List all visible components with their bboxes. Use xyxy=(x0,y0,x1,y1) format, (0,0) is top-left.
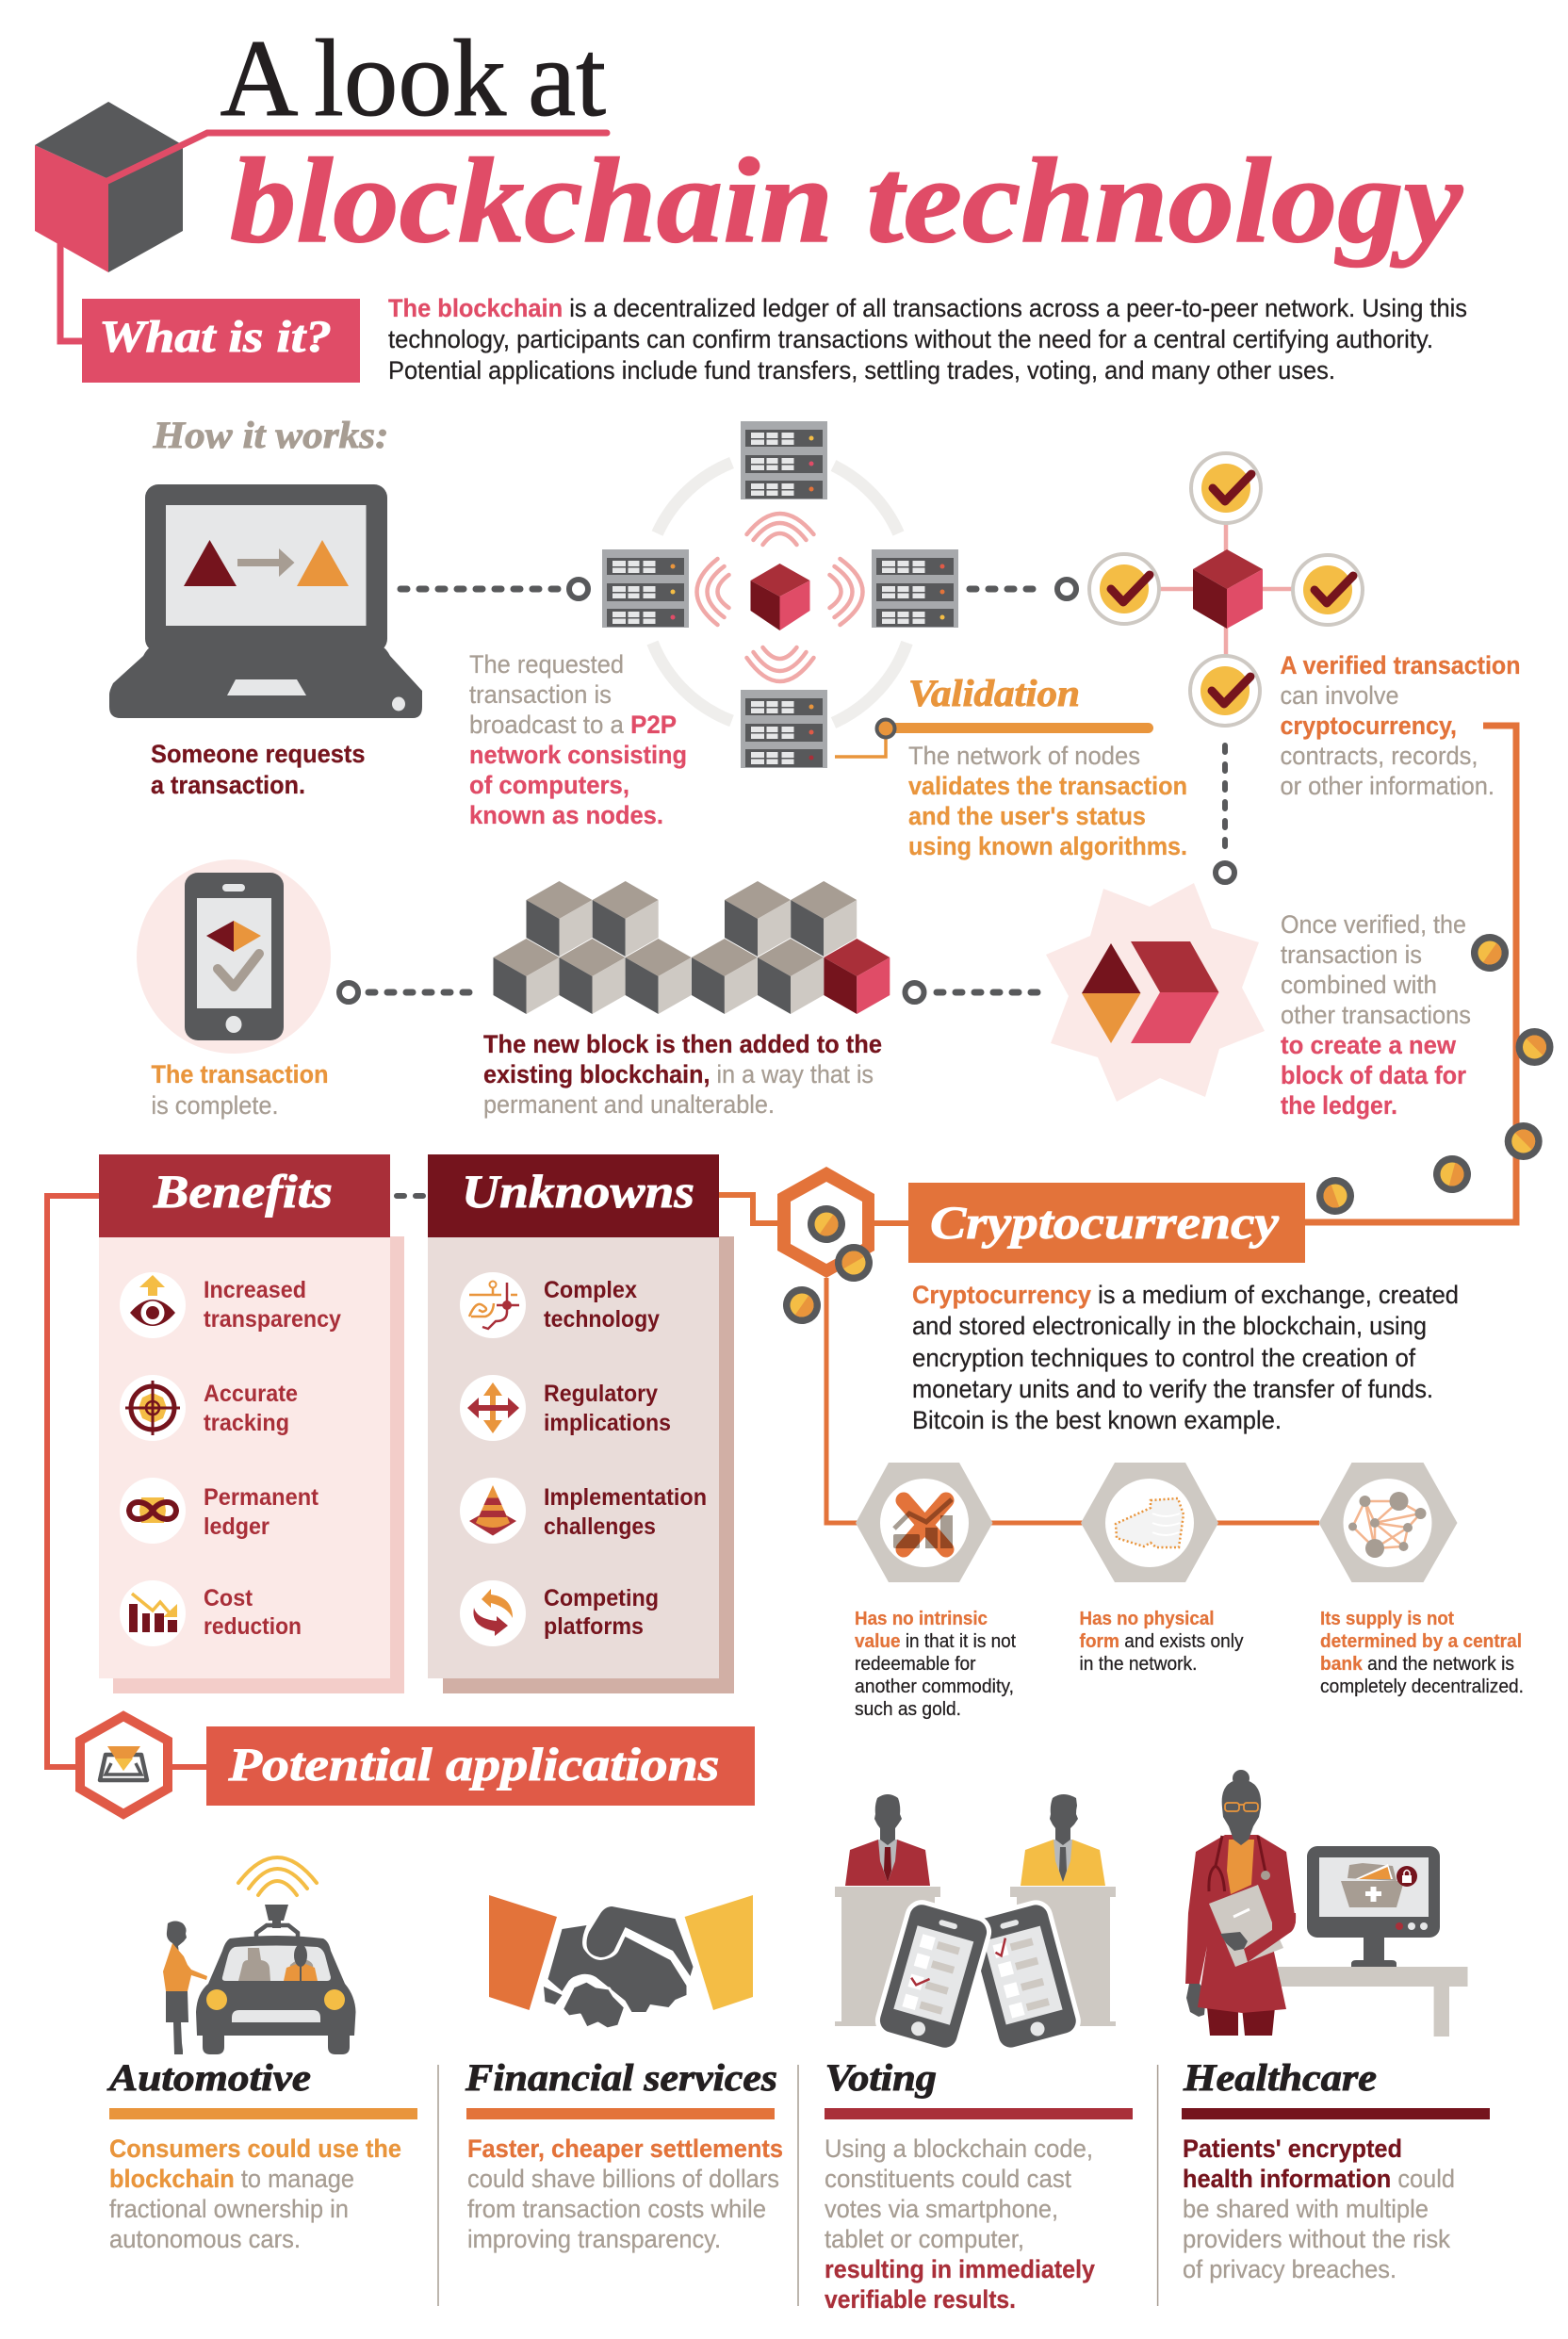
icon: potential applications hexagon xyxy=(80,1716,168,1814)
text: validation description: using known algorithms. xyxy=(908,832,1187,860)
text: new block added: permanent and unalterable. xyxy=(483,1090,775,1119)
text: automotive description: Consumers could use the xyxy=(109,2135,401,2163)
icon: coins along the line xyxy=(1311,926,1561,1220)
label: implementation challenges xyxy=(544,1484,707,1540)
dividers xyxy=(438,2065,1158,2306)
text: validation description xyxy=(908,742,1187,860)
text: requested transaction is broadcast: of computers, xyxy=(469,771,629,799)
text: no physical form: in the network. xyxy=(1080,1653,1197,1675)
text: requested transaction is broadcast: known as nodes. xyxy=(469,801,663,829)
heading: Financial services: Financial services xyxy=(465,2056,777,2099)
heading: Automotive: Automotive xyxy=(106,2056,311,2099)
heading: How it works: How it works: xyxy=(152,414,388,456)
arrow: dotted line to new block xyxy=(1216,745,1234,882)
text: someone requests: a transaction. xyxy=(151,771,305,799)
text: no physical form: Has no physical xyxy=(1080,1608,1214,1629)
text: blockchain definition: The blockchain is a decentralized ledger of all transactions across a peer-to-peer network. Using this xyxy=(388,294,1467,322)
text: voting description: verifiable results. xyxy=(825,2285,1016,2314)
text: voting description: votes via smartphone, xyxy=(825,2195,1058,2223)
label: cost reduction: Cost xyxy=(204,1585,253,1611)
text: requested transaction is broadcast: broadcast to a P2P xyxy=(469,711,677,739)
server: top xyxy=(741,421,827,499)
figure: candidate right xyxy=(1021,1794,1105,1886)
icon: network centre cube xyxy=(750,564,810,630)
arrow: laptop to network xyxy=(400,580,588,598)
icon: cost reduction chart xyxy=(120,1580,186,1646)
label: accurate tracking xyxy=(204,1381,298,1436)
text: once verified: Once verified, the xyxy=(1281,910,1466,939)
text: voting description xyxy=(825,2135,1095,2314)
text: financial description xyxy=(467,2135,783,2253)
label: complex technology xyxy=(544,1277,660,1333)
text: no physical form xyxy=(1080,1608,1244,1675)
text: automotive description: autonomous cars. xyxy=(109,2225,301,2253)
text: validation description: and the user's status xyxy=(908,802,1146,830)
text: healthcare description: Patients' encrypted xyxy=(1183,2135,1402,2163)
podium: left xyxy=(835,1887,940,2026)
label: complex technology: technology xyxy=(544,1306,660,1333)
title: A look at: A look at xyxy=(220,18,606,139)
text: validation description: validates the transaction xyxy=(908,772,1187,800)
text: cryptocurrency definition xyxy=(912,1281,1459,1434)
text: no intrinsic value: Has no intrinsic xyxy=(855,1608,988,1629)
label: regulatory implications: implications xyxy=(544,1410,671,1436)
text: a verified transaction: can involve xyxy=(1280,681,1398,710)
text: transaction complete xyxy=(151,1060,328,1120)
heading: What is it?: What is it? xyxy=(99,312,332,362)
podium: right xyxy=(1010,1887,1116,2026)
connector: benefits to unknowns dots xyxy=(397,1193,425,1199)
icon: no intrinsic value xyxy=(856,1463,993,1582)
heading: Cryptocurrency: Cryptocurrency xyxy=(930,1196,1280,1249)
connector: unknowns to cryptocurrency hexagon xyxy=(719,1195,908,1223)
text: a verified transaction: A verified transaction xyxy=(1280,651,1521,679)
text: transaction complete: The transaction xyxy=(151,1060,328,1088)
text: no intrinsic value: such as gold. xyxy=(855,1698,961,1720)
icon: traffic cone xyxy=(460,1478,526,1544)
arrow: new block to blockchain xyxy=(905,983,1040,1002)
diagram: peer-to-peer network xyxy=(602,421,958,768)
heading: Validation: Validation xyxy=(908,672,1080,714)
server: left xyxy=(602,549,689,628)
heading: Unknowns: Unknowns xyxy=(462,1165,694,1218)
text: automotive description xyxy=(109,2135,401,2253)
icon: smartphone complete xyxy=(137,859,331,1054)
text: supply not determined: Its supply is not xyxy=(1320,1608,1454,1629)
text: new block added: The new block is then added to the xyxy=(483,1030,882,1058)
label: competing platforms: Competing xyxy=(544,1585,659,1611)
arrow: network to validation xyxy=(970,580,1076,598)
heading: Voting: Voting xyxy=(825,2056,937,2099)
figure: candidate left xyxy=(845,1794,930,1886)
text: a verified transaction xyxy=(1280,651,1521,800)
text: voting description: resulting in immediately xyxy=(825,2255,1095,2283)
text: voting description: tablet or computer, xyxy=(825,2225,1024,2253)
icon: title cube with connector lines xyxy=(35,102,607,341)
label: regulatory implications xyxy=(544,1381,671,1436)
server: right xyxy=(872,549,958,628)
connector: validation bar xyxy=(835,720,1153,757)
diagram: verified transaction cube and checks xyxy=(1089,453,1363,726)
text: a verified transaction: contracts, records, xyxy=(1280,742,1478,770)
text: once verified xyxy=(1281,910,1471,1120)
icon: check left xyxy=(1089,554,1159,624)
text: no intrinsic value: another commodity, xyxy=(855,1676,1014,1697)
text: financial description: improving transparency. xyxy=(467,2225,721,2253)
illustration: handshake xyxy=(489,1895,753,2029)
server: bottom xyxy=(741,690,827,768)
text: requested transaction is broadcast: network consisting xyxy=(469,741,687,769)
panel: benefits xyxy=(99,1154,404,1693)
figure: doctor xyxy=(1185,1770,1296,2036)
icon: competing arrows xyxy=(460,1580,526,1646)
text: transaction complete: is complete. xyxy=(151,1091,279,1120)
text: blockchain definition: technology, participants can confirm transactions without the need for a central certifying authority. xyxy=(388,325,1433,353)
text: a verified transaction: or other information. xyxy=(1280,772,1494,800)
connector: orange line to cryptocurrency xyxy=(1305,726,1516,1222)
text: validation description: The network of nodes xyxy=(908,742,1140,770)
monitor xyxy=(1307,1846,1440,1967)
icon: no physical form xyxy=(1081,1463,1218,1582)
panel: unknowns xyxy=(428,1154,734,1693)
label: increased transparency xyxy=(204,1277,341,1333)
icon: phone right xyxy=(968,1903,1079,2050)
text: once verified: other transactions xyxy=(1281,1001,1471,1029)
label: permanent ledger: ledger xyxy=(204,1513,270,1540)
label: implementation challenges: Implementation xyxy=(544,1484,707,1511)
connector: cryptocurrency properties line xyxy=(826,1278,1319,1523)
text: supply not determined: completely decentralized. xyxy=(1320,1676,1524,1697)
heading: Potential applications: Potential applications xyxy=(227,1738,719,1791)
icon: target tracking xyxy=(120,1375,186,1441)
application: automotive xyxy=(106,2056,417,2253)
application: financial services xyxy=(465,2056,783,2253)
icon: complex technology xyxy=(460,1272,526,1338)
icon: cryptocurrency hexagon xyxy=(776,1167,879,1332)
icon: check top xyxy=(1191,453,1261,523)
heading: What is it? xyxy=(82,299,360,383)
label: complex technology: Complex xyxy=(544,1277,637,1303)
text: cryptocurrency definition: monetary units and to verify the transfer of funds. xyxy=(912,1375,1433,1403)
text: cryptocurrency definition: encryption techniques to control the creation of xyxy=(912,1344,1415,1372)
label: competing platforms xyxy=(544,1585,659,1640)
text: financial description: Faster, cheaper settlements xyxy=(467,2135,783,2163)
illustration: doctor and monitor xyxy=(1185,1770,1468,2036)
text: new block added xyxy=(483,1030,882,1119)
heading: Healthcare: Healthcare xyxy=(1183,2056,1377,2099)
diagram: blockchain cubes xyxy=(494,881,890,1014)
icon: decentralized network xyxy=(1319,1463,1457,1582)
text: voting description: constituents could cast xyxy=(825,2165,1071,2193)
text: supply not determined: determined by a central xyxy=(1320,1630,1522,1652)
illustration: autonomous car xyxy=(163,1857,356,2054)
icon: phone left xyxy=(877,1902,989,2051)
icon: regulatory arrows xyxy=(460,1375,526,1441)
illustration: woman beside car xyxy=(163,1921,207,2054)
label: accurate tracking: Accurate xyxy=(204,1381,298,1407)
text: once verified: combined with xyxy=(1281,971,1437,999)
icon: eye transparency xyxy=(120,1272,186,1338)
icon: combined block star xyxy=(1046,883,1265,1102)
text: once verified: to create a new xyxy=(1281,1031,1457,1059)
text: requested transaction is broadcast: The requested xyxy=(469,650,624,679)
icon: laptop xyxy=(109,484,422,718)
label: permanent ledger: Permanent xyxy=(204,1484,319,1511)
text: healthcare description: be shared with multiple xyxy=(1183,2195,1429,2223)
text: new block added: existing blockchain, in a way that is xyxy=(483,1060,874,1088)
icon: new red block xyxy=(824,939,890,1014)
text: someone requests xyxy=(151,740,366,799)
label: cost reduction: reduction xyxy=(204,1613,302,1640)
text: someone requests: Someone requests xyxy=(151,740,366,768)
text: blockchain definition: Potential applications include fund transfers, settling trades, voting, and many other uses. xyxy=(388,356,1335,384)
title: blockchain technology: blockchain technology xyxy=(230,133,1463,268)
label: increased transparency: Increased xyxy=(204,1277,306,1303)
text: financial description: from transaction costs while xyxy=(467,2195,766,2223)
label: competing platforms: platforms xyxy=(544,1613,644,1640)
text: no physical form: form and exists only xyxy=(1080,1630,1244,1652)
icon: infinity ledger xyxy=(120,1478,186,1544)
text: healthcare description: of privacy breaches. xyxy=(1183,2255,1396,2283)
label: regulatory implications: Regulatory xyxy=(544,1381,658,1407)
text: automotive description: fractional ownership in xyxy=(109,2195,349,2223)
text: cryptocurrency definition: Cryptocurrency is a medium of exchange, created xyxy=(912,1281,1459,1309)
text: cryptocurrency definition: Bitcoin is the best known example. xyxy=(912,1406,1282,1434)
text: no intrinsic value xyxy=(855,1608,1016,1720)
label: permanent ledger xyxy=(204,1484,319,1540)
icon: check right xyxy=(1293,555,1363,625)
heading: Cryptocurrency xyxy=(908,1183,1305,1263)
text: automotive description: blockchain to manage xyxy=(109,2165,354,2193)
label: increased transparency: transparency xyxy=(204,1306,341,1333)
heading: Benefits: Benefits xyxy=(153,1165,333,1218)
text: supply not determined xyxy=(1320,1608,1524,1697)
text: requested transaction is broadcast xyxy=(469,650,687,829)
text: no intrinsic value: value in that it is not xyxy=(855,1630,1016,1652)
application: voting xyxy=(825,2056,1133,2314)
label: cost reduction xyxy=(204,1585,302,1640)
connector: hexagon to heading xyxy=(172,1764,207,1770)
text: once verified: block of data for xyxy=(1281,1061,1466,1089)
text: once verified: transaction is xyxy=(1281,941,1422,969)
arrow: block chain to phone xyxy=(339,983,469,1002)
label: accurate tracking: tracking xyxy=(204,1410,289,1436)
text: a verified transaction: cryptocurrency, xyxy=(1280,712,1457,740)
text: supply not determined: bank and the network is xyxy=(1320,1653,1514,1675)
text: healthcare description: providers without the risk xyxy=(1183,2225,1450,2253)
connector: left red line xyxy=(47,1196,99,1767)
application: healthcare xyxy=(1182,2056,1490,2283)
text: healthcare description: health information could xyxy=(1183,2165,1455,2193)
text: healthcare description xyxy=(1183,2135,1455,2283)
text: voting description: Using a blockchain code, xyxy=(825,2135,1093,2163)
text: requested transaction is broadcast: transaction is xyxy=(469,680,612,709)
label: implementation challenges: challenges xyxy=(544,1513,656,1540)
heading: Potential applications xyxy=(206,1726,755,1806)
text: blockchain definition xyxy=(388,294,1467,384)
table xyxy=(1278,1967,1468,2036)
illustration: voting candidates and phones xyxy=(835,1794,1116,2051)
text: no intrinsic value: redeemable for xyxy=(855,1653,976,1675)
icon: check bottom xyxy=(1190,656,1260,726)
text: cryptocurrency definition: and stored electronically in the blockchain, using xyxy=(912,1312,1427,1340)
text: financial description: could shave billions of dollars xyxy=(467,2165,779,2193)
text: once verified: the ledger. xyxy=(1281,1091,1397,1120)
